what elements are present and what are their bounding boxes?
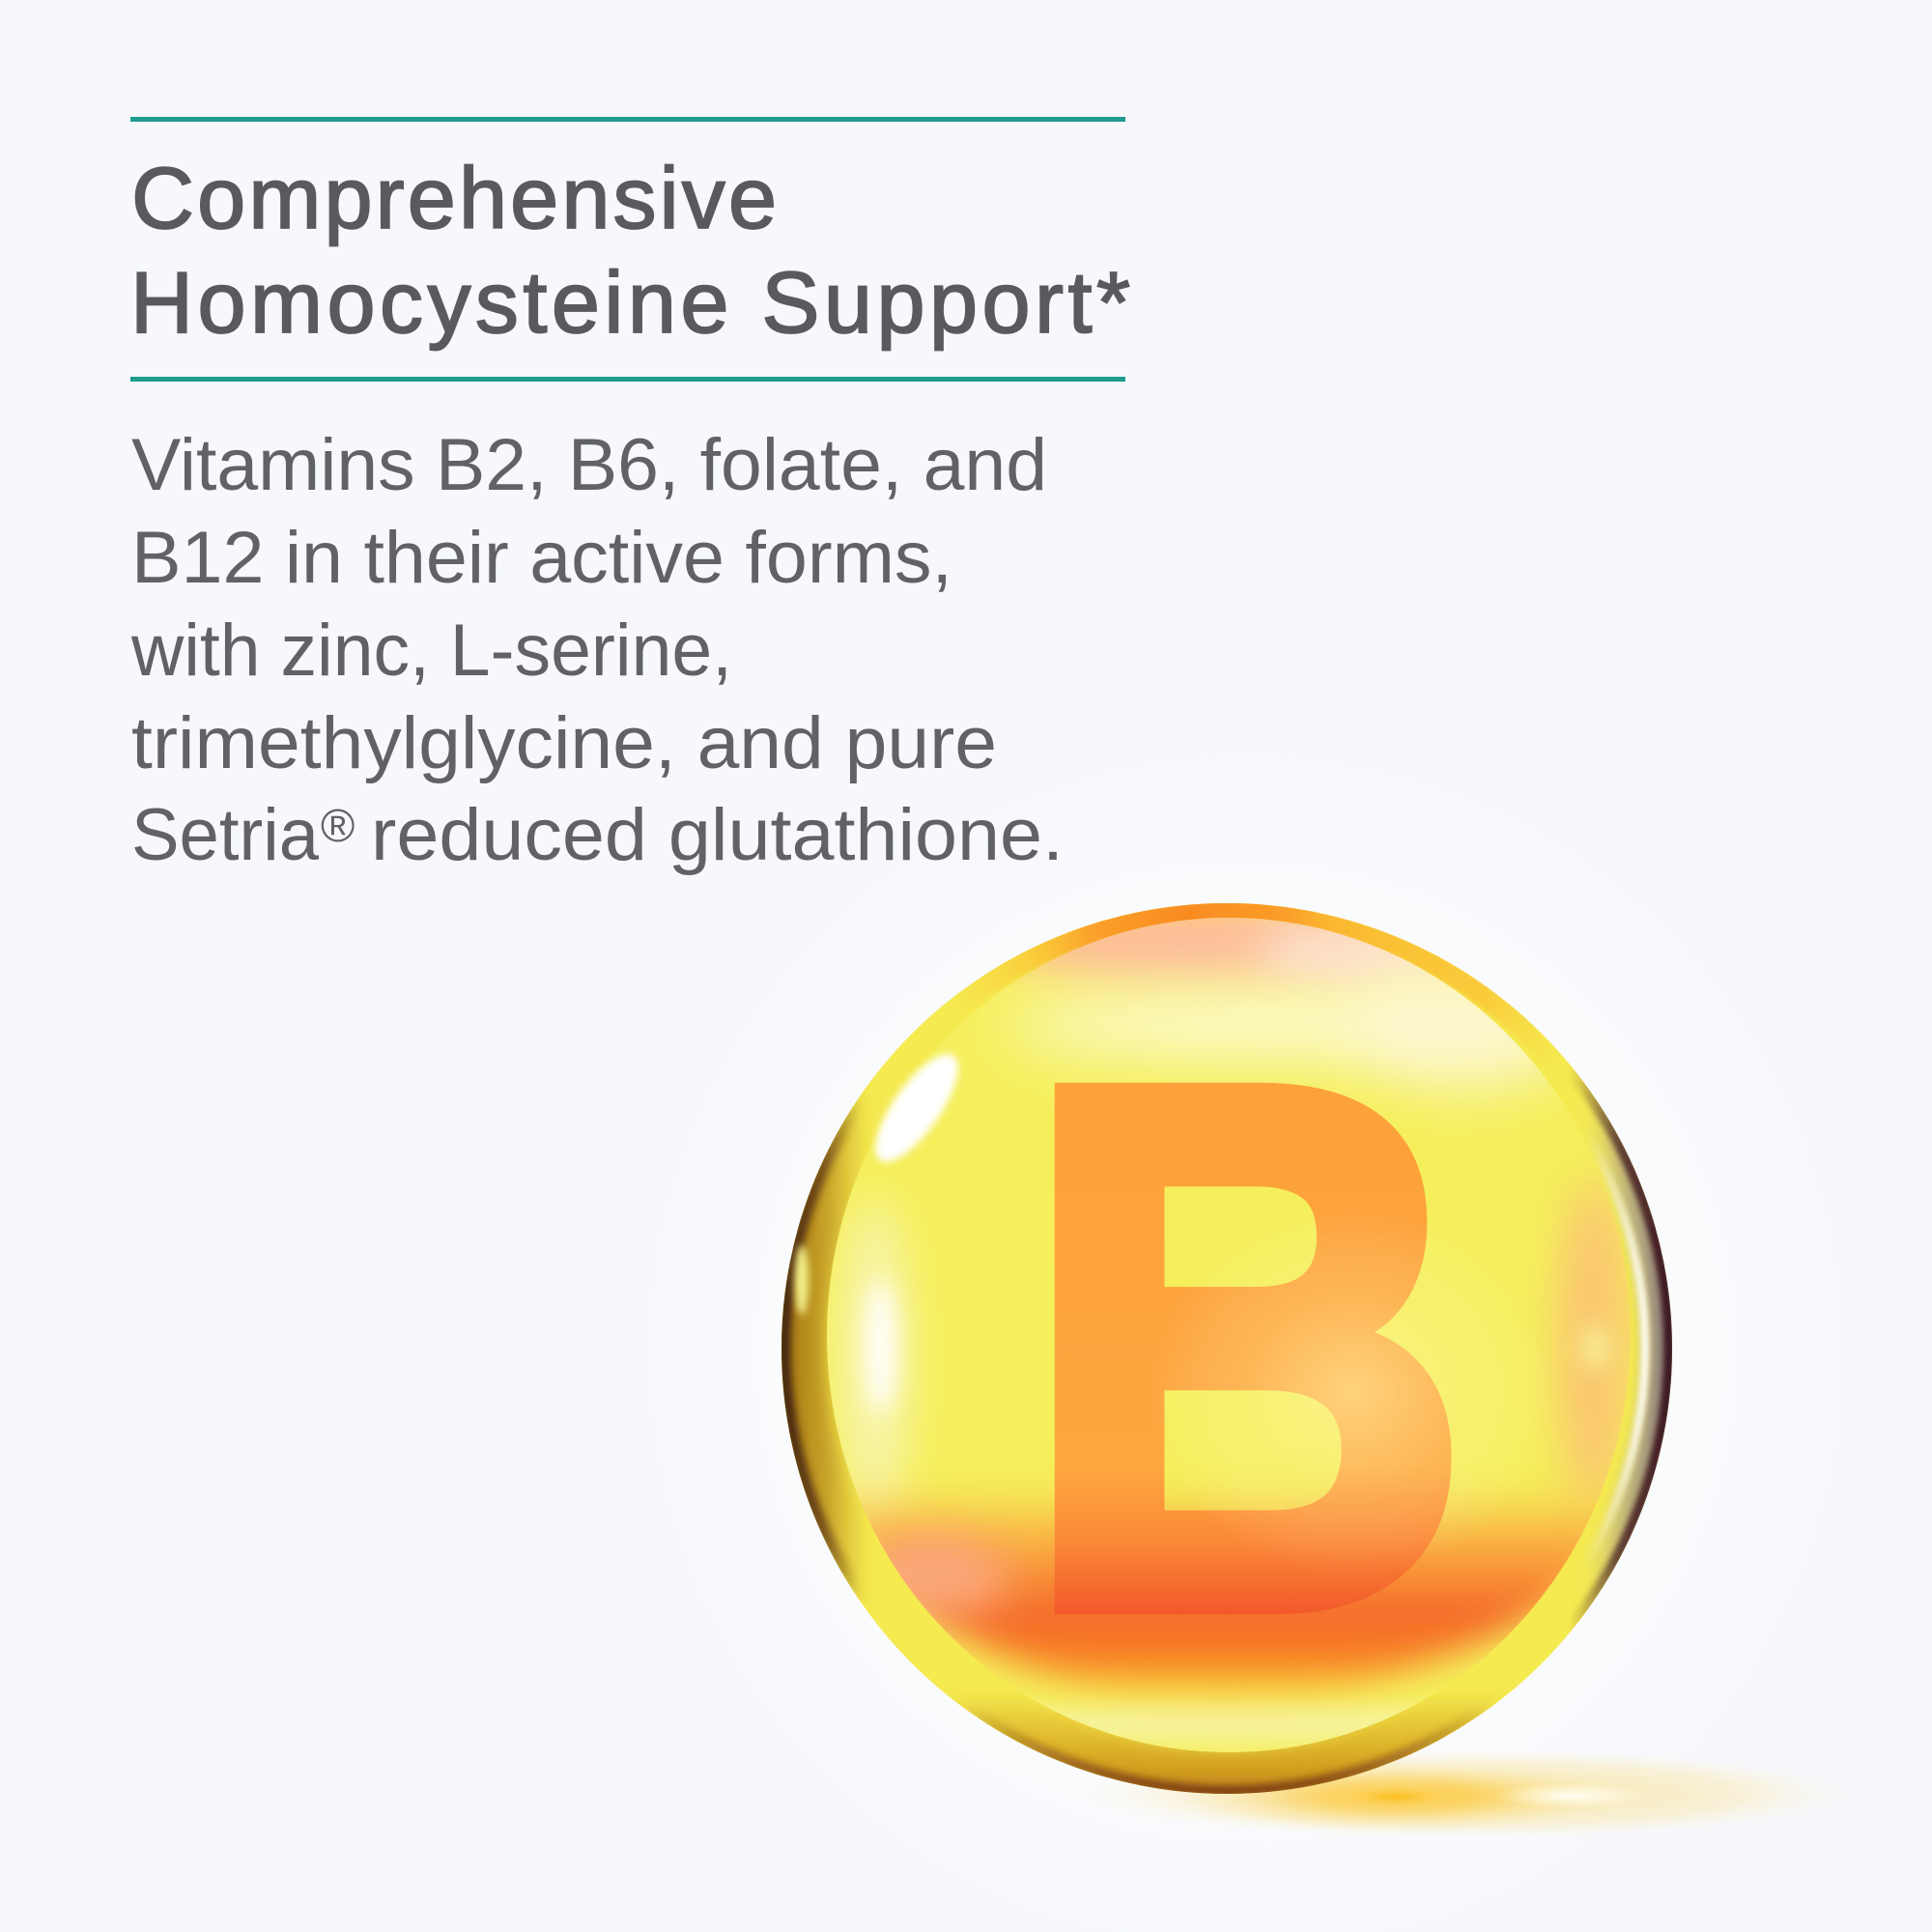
body text: trimethylglycine, and pure — [131, 702, 997, 784]
sphere body — [781, 903, 1672, 1794]
rule: top teal divider — [130, 117, 1125, 122]
body text: ® — [321, 801, 355, 852]
body text: Vitamins B2, B6, folate, and — [131, 424, 1047, 506]
bottom orange band — [821, 1483, 1642, 1705]
heading: Homocysteine Support* — [130, 255, 1130, 352]
body text — [130, 424, 1064, 876]
right peach glow — [1557, 1179, 1631, 1507]
vitamin B sphere — [781, 901, 1672, 1794]
inner lens — [827, 918, 1631, 1752]
left pale glow — [838, 1198, 911, 1526]
rule: bottom teal divider — [130, 377, 1125, 382]
body text: reduced glutathione. — [371, 794, 1064, 876]
pale band — [1005, 991, 1565, 1057]
rim glint — [795, 1245, 809, 1315]
body text: Setria — [131, 794, 320, 876]
letter B: B — [1024, 935, 1469, 1758]
peach top — [1018, 918, 1385, 995]
highlight: top-left glint — [861, 1042, 973, 1174]
inner lens glow layers — [821, 901, 1642, 1744]
lower-left peach — [855, 1534, 1009, 1615]
body text: with zinc, L-serine, — [130, 610, 732, 692]
sphere rim shading — [784, 906, 1669, 1791]
heading: Comprehensive — [131, 151, 777, 247]
body text: B12 in their active forms, — [131, 517, 952, 599]
heading — [130, 151, 1130, 352]
letter glow — [1150, 1208, 1555, 1575]
bottom pale band — [918, 1705, 1536, 1744]
ground shadow — [1077, 1748, 1860, 1839]
